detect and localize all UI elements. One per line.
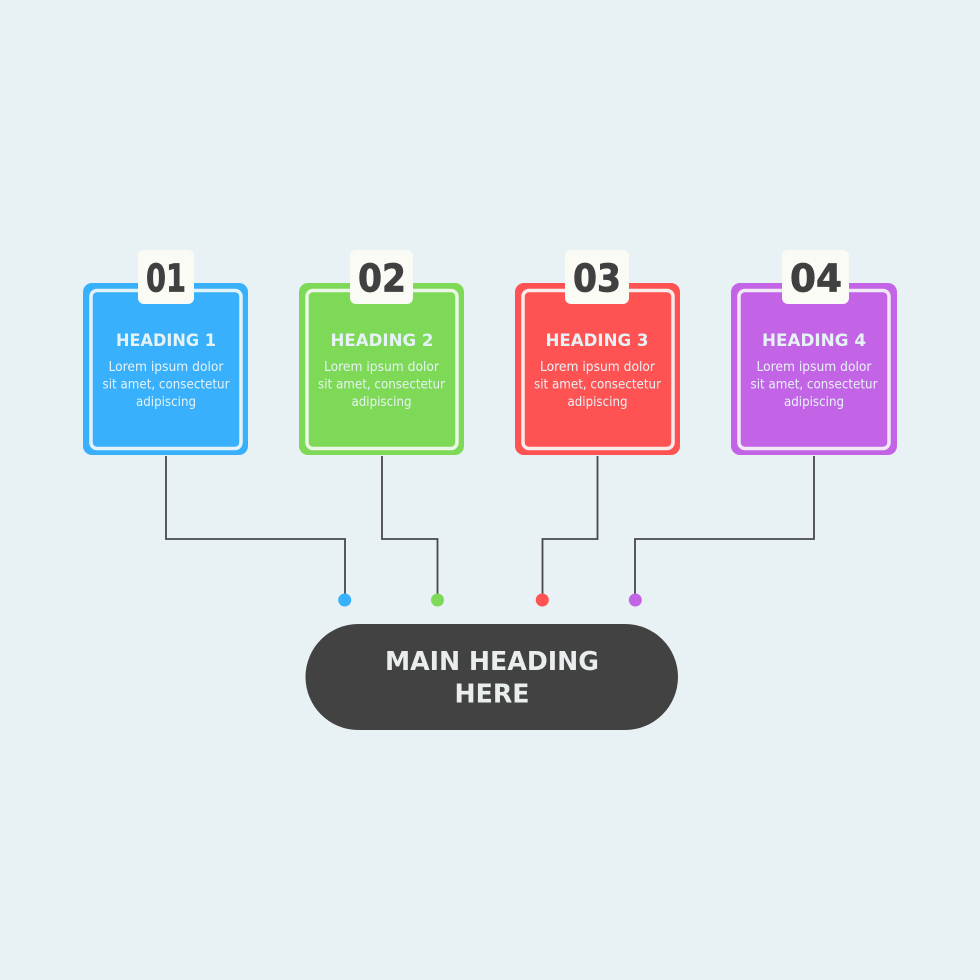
panel: card 4 [731, 250, 897, 455]
connector 2 with dot [382, 456, 444, 606]
body text 2: sit amet, consectetur [318, 376, 445, 392]
panel: card 3 [515, 250, 680, 455]
badge: 03: 03 [573, 256, 621, 300]
badge: 04 [782, 250, 849, 304]
body text 1: Lorem ipsum dolor [108, 359, 224, 375]
main heading text: HERE [454, 680, 530, 710]
panel: card 1 [83, 250, 248, 455]
main heading text [385, 647, 599, 710]
body text 1: sit amet, consectetur [102, 376, 230, 392]
heading 4: HEADING 4 [762, 331, 866, 351]
body text 3: sit amet, consectetur [534, 376, 661, 392]
body text 3: adipiscing [568, 394, 628, 410]
badge: 01: 01 [146, 256, 186, 300]
panel: card 2 [299, 250, 464, 455]
body text 4: Lorem ipsum dolor [756, 359, 872, 375]
heading 1: HEADING 1 [116, 331, 216, 351]
connector 3 with dot [536, 456, 598, 606]
heading 3: HEADING 3 [546, 331, 648, 351]
main heading text: MAIN HEADING [385, 647, 599, 677]
body text 1 [102, 359, 230, 410]
body text 2: adipiscing [352, 394, 412, 410]
body text 4: adipiscing [784, 394, 844, 410]
badge: 02: 02 [358, 256, 406, 300]
body text 3: Lorem ipsum dolor [540, 359, 655, 375]
main heading pill [306, 624, 678, 730]
body text 1: adipiscing [136, 394, 196, 410]
body text 4: sit amet, consectetur [750, 376, 878, 392]
badge: 04: 04 [790, 256, 842, 300]
body text 3 [534, 359, 661, 410]
body text 2 [318, 359, 445, 410]
badge: 02 [350, 250, 413, 304]
badge: 03 [565, 250, 629, 304]
badge: 01 [138, 250, 194, 304]
heading 2: HEADING 2 [330, 331, 434, 351]
body text 2: Lorem ipsum dolor [324, 359, 439, 375]
connector 4 with dot [629, 456, 814, 606]
body text 4 [750, 359, 878, 410]
connector 1 with dot [166, 456, 351, 606]
